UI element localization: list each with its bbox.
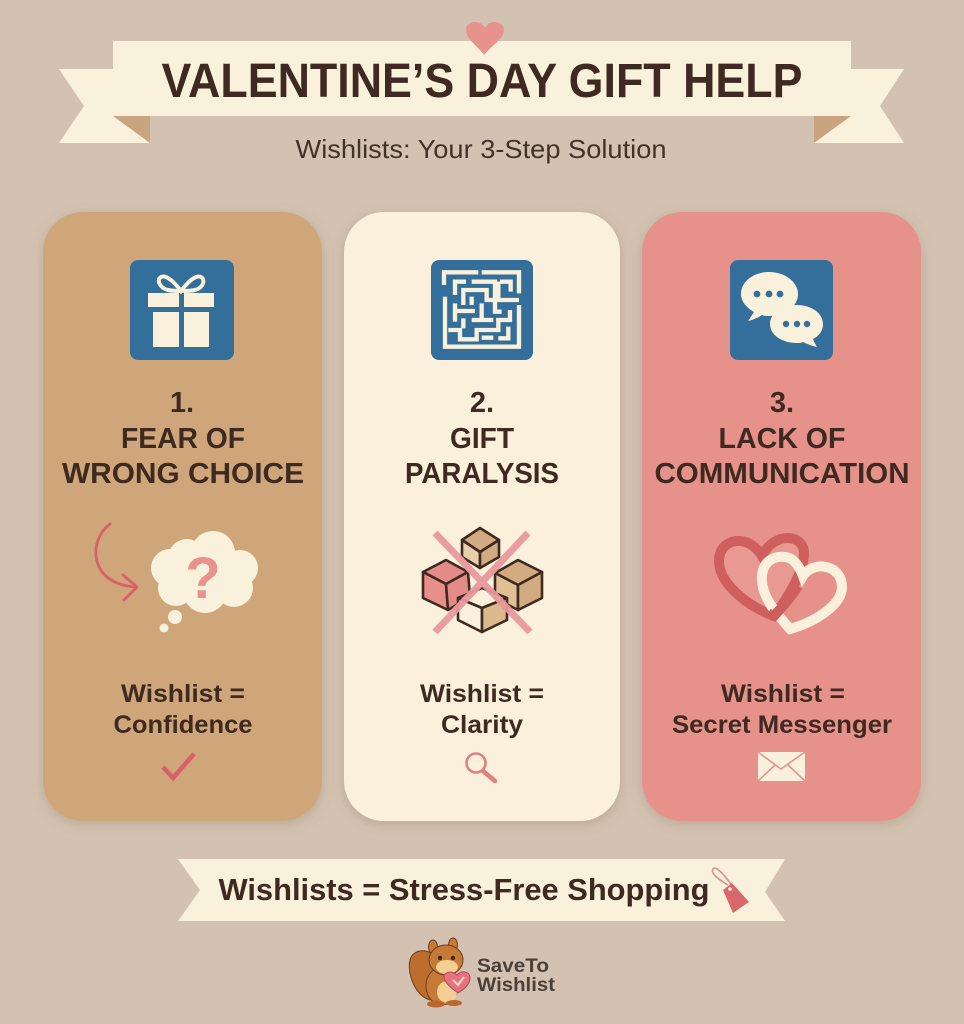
equation text: Wishlist = [420, 680, 544, 708]
icon: thought cloud [151, 531, 258, 632]
equation text [420, 680, 544, 739]
wordmark [477, 956, 556, 996]
icon: check mark [163, 754, 194, 778]
icon: price tag [712, 868, 749, 913]
equation text: Confidence [114, 711, 253, 739]
equation text: Clarity [441, 711, 523, 739]
icon: heart [466, 22, 504, 55]
panel: fear of wrong choice [43, 212, 322, 821]
wordmark: SaveTo [477, 956, 549, 977]
equation text [672, 680, 892, 739]
heading: GIFT [450, 423, 514, 455]
heading: LACK OF [718, 423, 846, 455]
heading: WRONG CHOICE [62, 458, 304, 490]
heading [62, 387, 304, 490]
icon: linked hearts [719, 538, 842, 629]
heading: 2. [470, 387, 494, 419]
icon: envelope [758, 752, 805, 781]
title ribbon [59, 22, 904, 143]
icon: thought cloud: ? [185, 546, 221, 611]
heading [654, 387, 910, 490]
equation text [114, 680, 253, 739]
panel: lack of communication [642, 212, 921, 821]
heading [405, 387, 559, 490]
heading: PARALYSIS [405, 458, 559, 490]
heading: FEAR OF [121, 423, 245, 455]
heading: 1. [170, 387, 194, 419]
icon: maze [431, 260, 533, 360]
equation text: Wishlist = [721, 680, 845, 708]
icon: gift [130, 260, 234, 360]
logo [409, 938, 556, 1008]
equation text: Secret Messenger [672, 711, 892, 739]
heading: COMMUNICATION [654, 458, 910, 490]
arrow [96, 524, 137, 600]
icon: magnifier [466, 754, 495, 781]
equation text: Wishlist = [121, 680, 245, 708]
icon: speech bubbles [730, 260, 833, 360]
ribbon text: Wishlists = Stress-Free Shopping [218, 872, 710, 907]
icon: squirrel mascot [409, 938, 470, 1008]
subtitle: Wishlists: Your 3-Step Solution [296, 134, 666, 164]
icon: crossed boxes [423, 528, 542, 632]
heading: 3. [770, 387, 794, 419]
bottom ribbon [178, 859, 785, 921]
wordmark: Wishlist [477, 975, 556, 996]
title text: VALENTINE’S DAY GIFT HELP [162, 55, 802, 108]
panel: gift paralysis [344, 212, 620, 821]
